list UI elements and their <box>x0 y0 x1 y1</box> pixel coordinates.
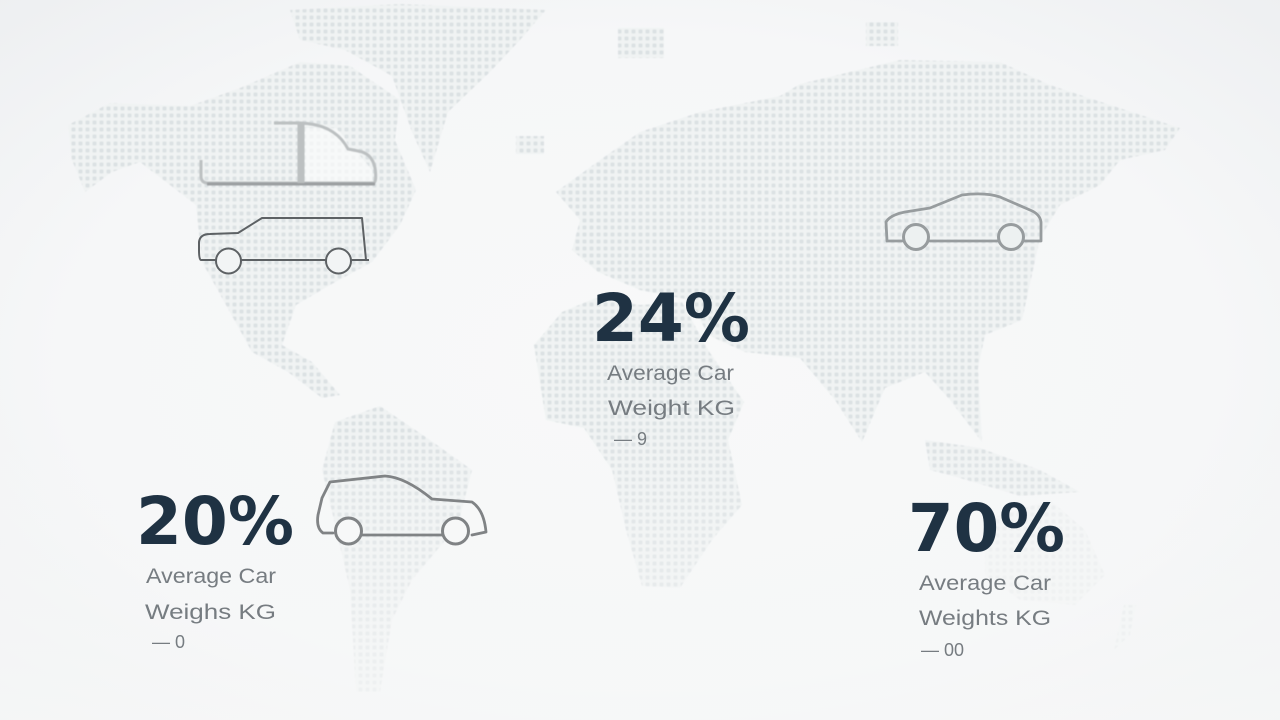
label line two: Weights KG <box>919 607 1051 630</box>
label line two: Weighs KG <box>145 601 276 624</box>
icon: pickup truck outline <box>201 123 376 184</box>
icon: sedan outline <box>886 194 1041 250</box>
icon: SUV wagon outline <box>199 218 369 274</box>
value: 24% <box>592 280 750 357</box>
map: southeast asia islands <box>925 440 1080 496</box>
map: arctic and atlantic islands <box>516 22 898 154</box>
soft fade over southern map <box>0 430 1280 720</box>
icon: hatchback outline <box>318 476 486 544</box>
note: — 0 <box>152 632 185 652</box>
note: — 00 <box>921 640 964 660</box>
map: africa <box>534 298 744 588</box>
label: Average Car <box>919 572 1051 595</box>
note: — 9 <box>614 429 647 449</box>
stat: bottom-right 70% <box>908 490 1065 660</box>
stat: bottom-left 20% <box>136 483 294 652</box>
label: Average Car <box>607 362 734 385</box>
value: 20% <box>136 483 294 560</box>
label: Average Car <box>146 565 276 588</box>
map: new zealand <box>1114 605 1136 650</box>
map: australia <box>985 500 1105 605</box>
map: greenland <box>290 4 546 172</box>
map: south america <box>322 406 472 692</box>
stat: centre 24% <box>592 280 750 449</box>
map: north america <box>68 62 416 398</box>
label line two: Weight KG <box>608 397 735 420</box>
map: eurasia <box>556 60 1180 442</box>
value: 70% <box>908 490 1065 567</box>
